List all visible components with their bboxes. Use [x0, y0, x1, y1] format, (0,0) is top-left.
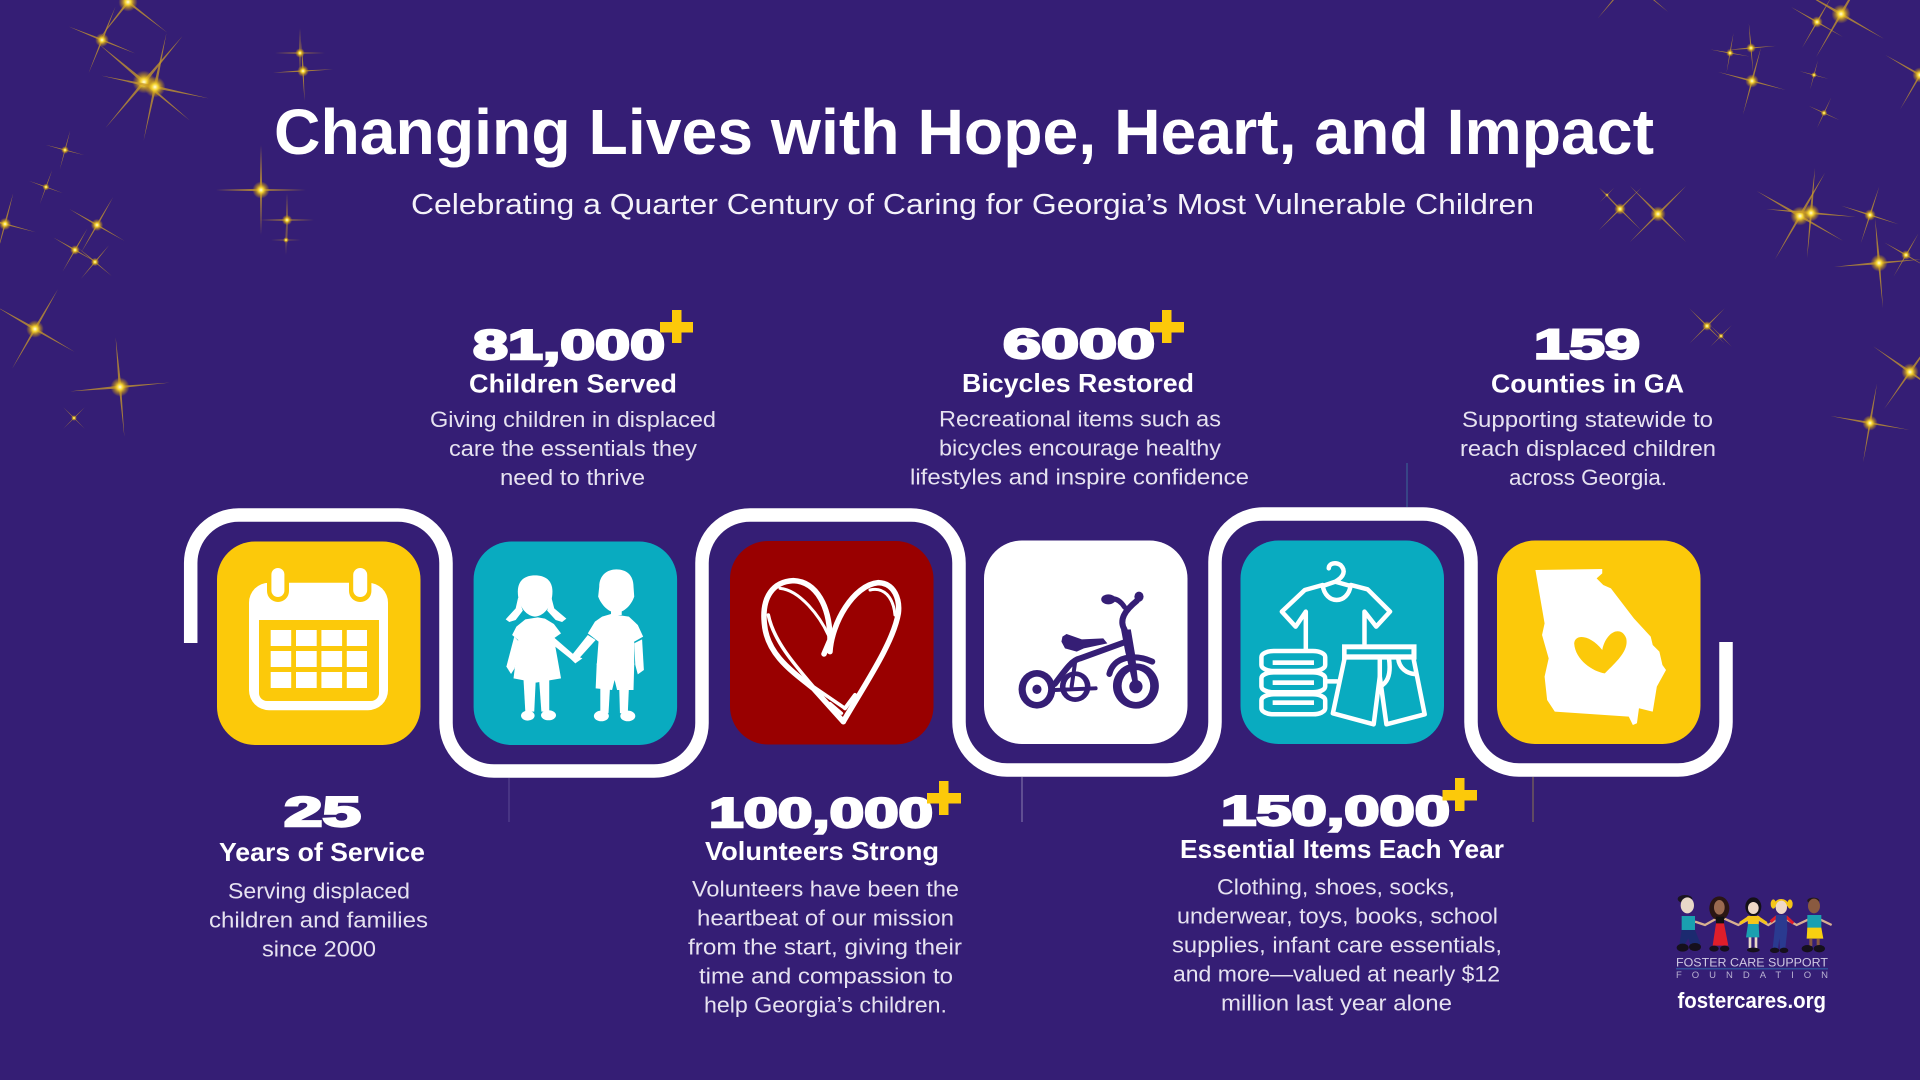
stat: 159 counties in GA: Counties in GA [1491, 368, 1684, 398]
stat: 6000+ bicycles restored: Recreational items such as [939, 406, 1221, 432]
stat: 81,000+ children served: 81,000 [473, 321, 665, 368]
stat: 25 years of service: since 2000 [262, 936, 376, 962]
white snake timeline path [191, 514, 1726, 771]
logo: Foster Care Support Foundation [1676, 895, 1832, 981]
stat: 100,000+ volunteers strong [688, 781, 962, 1018]
stat: 150,000+ essential items each year: underwear, toys, books, school [1177, 904, 1498, 928]
stat: 6000+ bicycles restored: lifestyles and inspire confidence [910, 464, 1249, 490]
stat: 150,000+ essential items each year: supplies, infant care essentials, [1172, 932, 1502, 958]
stat: 159 counties in GA: 159 [1534, 320, 1640, 368]
stat: 150,000+ essential items each year: and more—valued at nearly $12 [1173, 962, 1500, 986]
stat: 6000+ bicycles restored [910, 310, 1249, 490]
stat: 25 years of service [209, 788, 428, 962]
stat: 100,000+ volunteers strong: Volunteers have been the [692, 876, 959, 902]
stat: 150,000+ essential items each year [1172, 778, 1504, 1016]
subtitle: Celebrating a Quarter Century of Caring for Georgia’s Most Vulnerable Children [411, 189, 1534, 221]
icon tile: Georgia map with heart [1497, 540, 1700, 744]
stat: 81,000+ children served: Giving children in displaced [430, 407, 716, 432]
stat: 25 years of service: 25 [284, 788, 361, 835]
stat: 159 counties in GA: reach displaced children [1460, 436, 1716, 461]
icon tile: scribbled heart [730, 541, 934, 744]
stat: 81,000+ children served: care the essentials they [449, 436, 697, 461]
stat: 6000+ bicycles restored: Bicycles Restored [962, 368, 1194, 398]
website url: fostercares.org [1678, 988, 1826, 1013]
logo: Foster Care Support Foundation: FOSTER CARE SUPPORT [1676, 958, 1828, 970]
stat: 25 years of service: Serving displaced [228, 878, 410, 904]
stat: 150,000+ essential items each year: 150,000 [1221, 787, 1450, 834]
stat: 150,000+ essential items each year: Essential Items Each Year [1180, 834, 1504, 864]
stat: 100,000+ volunteers strong: 100,000 [709, 789, 933, 836]
stat: 150,000+ essential items each year: Clothing, shoes, socks, [1217, 874, 1455, 900]
stat: 100,000+ volunteers strong: heartbeat of our mission [697, 906, 954, 930]
stat: 159 counties in GA [1460, 320, 1716, 490]
stat: 150,000+ essential items each year: million last year alone [1221, 990, 1452, 1016]
decorative gold sparkle stars [0, 0, 1920, 469]
stat: 25 years of service: Years of Service [219, 837, 425, 867]
stat: 100,000+ volunteers strong: time and compassion to [699, 964, 953, 988]
logo: Foster Care Support Foundation: FOUNDATION [1676, 970, 1828, 981]
stat: 81,000+ children served: Children Served [469, 368, 677, 398]
stat: 100,000+ volunteers strong: from the start, giving their [688, 934, 962, 960]
stat: 6000+ bicycles restored: bicycles encourage healthy [939, 436, 1221, 460]
stat: 25 years of service: children and families [209, 908, 428, 932]
stat: 159 counties in GA: across Georgia. [1509, 465, 1667, 490]
icon tile: calendar [217, 542, 420, 745]
title: Changing Lives with Hope, Heart, and Impact [274, 96, 1654, 168]
icon tile: children holding hands [474, 542, 677, 745]
stat: 81,000+ children served: need to thrive [500, 465, 645, 490]
stat: 6000+ bicycles restored: 6000 [1003, 320, 1155, 367]
stat: 100,000+ volunteers strong: help Georgia’s children. [704, 992, 947, 1018]
icon tile: clothing [1240, 540, 1444, 744]
stat: 100,000+ volunteers strong: Volunteers Strong [705, 836, 939, 866]
stat: 81,000+ children served [430, 310, 716, 490]
stat: 159 counties in GA: Supporting statewide to [1462, 407, 1713, 432]
icon tile: tricycle [984, 540, 1188, 744]
logo illustration: five children holding hands [1677, 895, 1832, 953]
